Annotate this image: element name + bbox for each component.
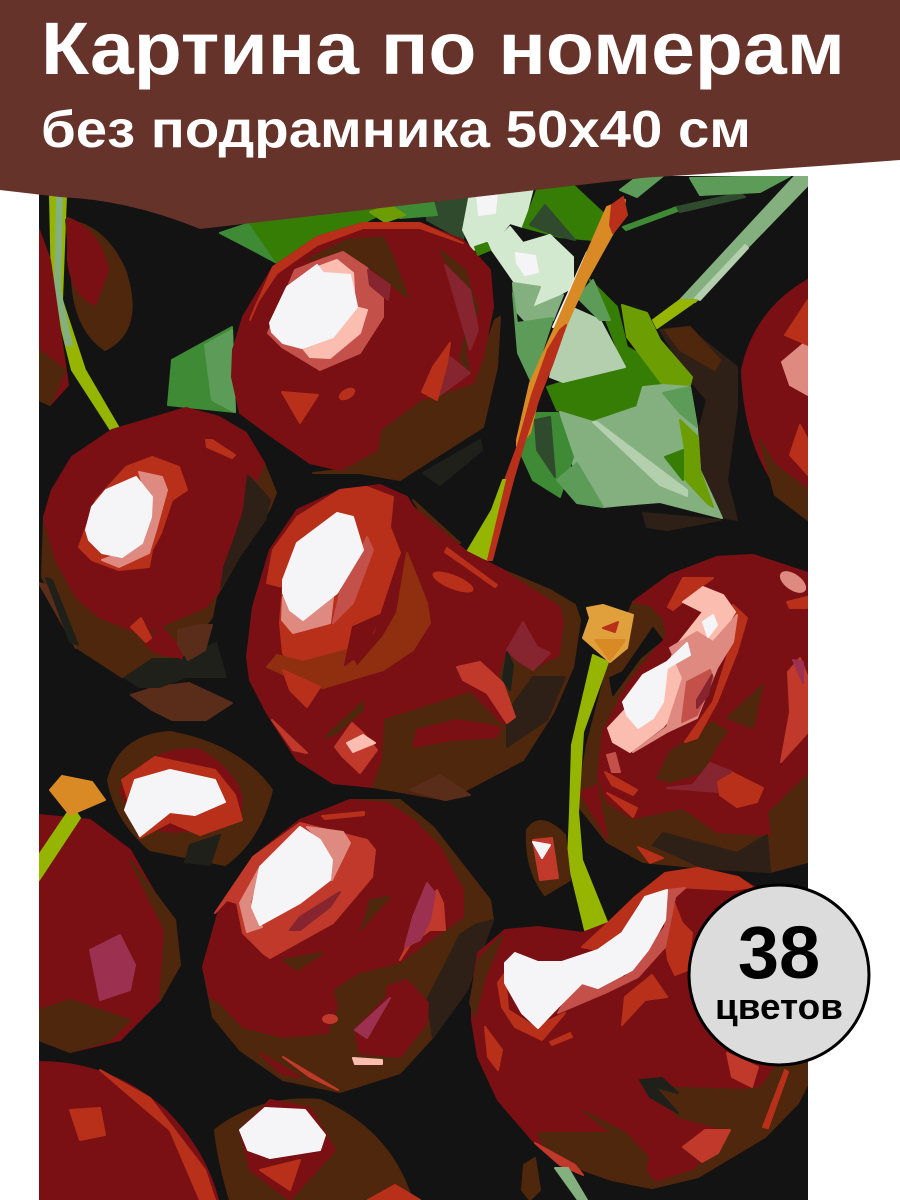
cherry: bottom middle [215,1099,420,1200]
subtitle: без подрамника 50х40 см [41,101,751,159]
title: Картина по номерам [41,7,845,90]
stem: central orange [467,197,627,560]
badge: 38 colours [689,885,869,1065]
cherry: left lower [39,776,180,1052]
top leaves above cherry [220,190,467,263]
cherry: small with crescent [108,732,272,865]
panel: cherry painting [39,176,810,1200]
stem: top right [620,176,808,328]
cherry: tiny center [527,821,570,895]
top left stem [50,195,120,435]
cherry: top left small [39,218,132,405]
dark shadow right of leaf [643,327,737,530]
badge: 38 colours: 38 [738,911,820,994]
cherry: left middle [39,408,276,720]
badge: 38 colours: цветов [715,986,843,1027]
cherry: bottom left [39,1062,218,1200]
cherry: center big [247,485,580,800]
cherry: right top [742,280,808,520]
big leaf right [463,185,722,518]
icon: small green leaf left [168,327,235,412]
stem: right cherry [568,605,633,930]
cherry: right middle [580,555,810,872]
cherry: bottom right [470,868,808,1200]
cherry: top center [232,223,500,485]
cherry: center lower [203,800,493,1092]
header banner [0,0,900,229]
